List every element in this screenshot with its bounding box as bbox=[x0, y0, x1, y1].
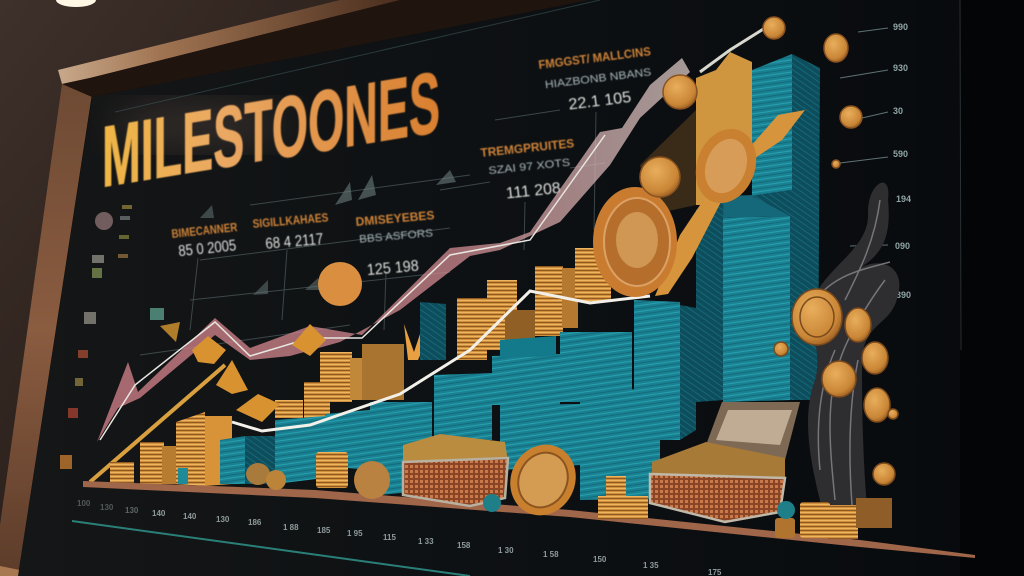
small line icons on chart bbox=[200, 170, 456, 295]
bottom axis numbers: 1 58 bbox=[543, 550, 559, 559]
ceiling lamp bbox=[56, 0, 96, 7]
right axis tick labels: 390 bbox=[896, 290, 911, 300]
coin piles on floor bbox=[178, 452, 892, 539]
milestone label 3: BBS ASFORS bbox=[359, 227, 433, 246]
medallion on floor bbox=[499, 434, 587, 526]
left side icon column bbox=[60, 205, 180, 469]
bottom axis numbers: 1 30 bbox=[498, 546, 514, 555]
milestone label 5: HIAZBONB NBANS bbox=[544, 66, 652, 91]
gold bars and coin stacks bbox=[110, 52, 752, 486]
title: MILESTONES: MILESTOONES bbox=[102, 55, 440, 206]
teal bar chart bbox=[220, 54, 820, 500]
bottom axis numbers: 115 bbox=[383, 533, 396, 542]
bottom axis numbers: 100 bbox=[77, 499, 91, 508]
golden diagonal arrow bbox=[90, 365, 225, 482]
floor shelf bbox=[83, 481, 975, 558]
gold coins on smoke bbox=[774, 289, 898, 485]
bottom axis numbers: 186 bbox=[248, 518, 262, 527]
milestone label 3: 125 198 bbox=[366, 258, 420, 279]
small chart coin bbox=[318, 262, 362, 306]
bottom axis numbers: 140 bbox=[152, 509, 166, 518]
gold wing bbox=[655, 110, 805, 296]
milestone label 1: BIMECANNER bbox=[171, 220, 238, 241]
milestone label 3: DMISEYEBES bbox=[355, 208, 435, 229]
milestone label 5: 22.1 105 bbox=[568, 89, 632, 114]
milestone label 2 bbox=[252, 210, 331, 254]
right axis tick labels: 090 bbox=[895, 241, 910, 251]
large medallion coin bbox=[593, 187, 677, 297]
milestone label 4 bbox=[480, 136, 580, 205]
milestone label 1: 85 0 2005 bbox=[178, 237, 237, 260]
gold leaf ornaments on ribbon bbox=[192, 324, 326, 422]
treasure chest right bbox=[650, 402, 800, 522]
grid lines bbox=[115, 0, 605, 355]
teal baseline bbox=[72, 521, 470, 576]
bottom axis numbers: 185 bbox=[317, 526, 331, 535]
bottom axis numbers: 150 bbox=[593, 555, 607, 564]
picture frame bbox=[0, 0, 590, 576]
bottom axis numbers: 130 bbox=[125, 506, 139, 515]
milestone label 4: TREMGPRUITES bbox=[480, 136, 575, 160]
gold V mark bbox=[404, 322, 434, 360]
bottom axis numbers: 140 bbox=[183, 512, 197, 521]
smoke swirl bbox=[808, 183, 899, 520]
medallion coin upper bbox=[686, 120, 766, 212]
bottom axis numbers: 130 bbox=[216, 515, 230, 524]
milestone label 4: SZAI 97 XOTS bbox=[488, 157, 571, 177]
treasure chest left bbox=[403, 434, 508, 506]
milestone label 2: 68 4 2117 bbox=[265, 231, 324, 253]
right axis tick labels: 990 bbox=[893, 22, 908, 32]
milestone label 3 bbox=[355, 208, 439, 280]
milestone label 5: FMGGST/ MALLCINS bbox=[538, 44, 652, 72]
right axis tick lines bbox=[840, 28, 888, 246]
bottom axis numbers: 1 88 bbox=[283, 523, 299, 532]
pink ribbon trend line bbox=[97, 58, 690, 442]
right axis tick labels: 590 bbox=[893, 149, 908, 159]
milestone label 2: SIGILLKAHAES bbox=[252, 210, 329, 231]
bottom axis numbers: 1 95 bbox=[347, 529, 363, 538]
milestone label 1 bbox=[171, 220, 240, 261]
floating gold coins bbox=[640, 17, 862, 197]
white rising trend line bbox=[232, 291, 650, 431]
bottom axis numbers: 1 33 bbox=[418, 537, 434, 546]
bottom axis numbers: 130 bbox=[100, 503, 114, 512]
right axis tick labels: 930 bbox=[893, 63, 908, 73]
right axis tick labels: 30 bbox=[893, 106, 903, 116]
bottom axis numbers: 158 bbox=[457, 541, 471, 550]
right axis tick labels: 194 bbox=[896, 194, 911, 204]
dark panel behind upper coins bbox=[640, 110, 696, 215]
milestone label 4: 111 208 bbox=[505, 180, 562, 203]
bottom axis numbers: 1 35 bbox=[643, 561, 659, 570]
bottom axis numbers bbox=[77, 499, 722, 576]
milestone label 5 bbox=[538, 44, 657, 117]
right axis tick labels bbox=[893, 22, 911, 300]
white line top segment bbox=[700, 28, 765, 72]
